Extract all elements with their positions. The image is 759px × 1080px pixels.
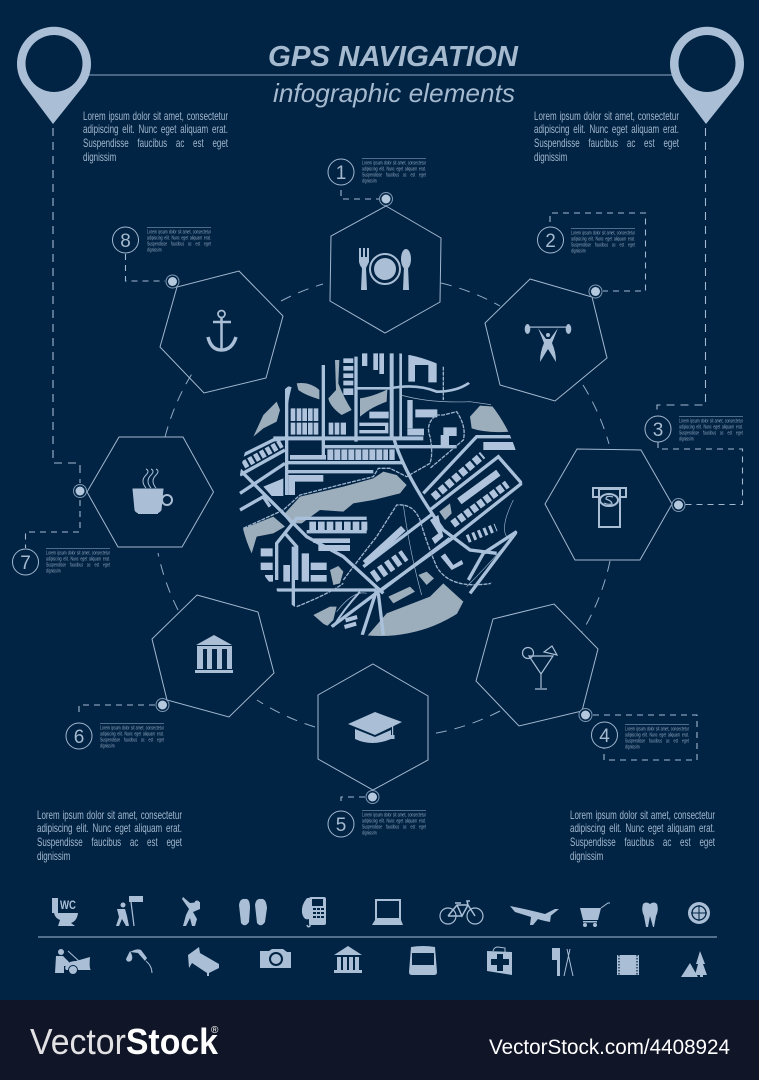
- connector dots: [74, 192, 685, 804]
- caption 8: adipiscing elit. Nunc eget aliquam erat.: [147, 235, 211, 241]
- watermark url: VectorStock.com/4408924: [489, 1036, 730, 1059]
- icon: toilet: [52, 898, 78, 926]
- icon: bank building: [334, 946, 362, 973]
- caption 7: Lorem ipsum dolor sit amet, consectetur: [46, 550, 110, 556]
- text block: top left: [83, 108, 228, 164]
- caption 1: [362, 158, 426, 186]
- icon: coffee cup: [133, 469, 172, 514]
- caption 2: Lorem ipsum dolor sit amet, consectetur: [571, 230, 635, 236]
- caption 5: Lorem ipsum dolor sit amet, consectetur: [362, 812, 426, 818]
- caption 5: adipiscing elit. Nunc eget aliquam erat.: [362, 818, 426, 824]
- icon: film strip: [617, 955, 639, 975]
- number badges: 1: [336, 163, 346, 184]
- dashed ring arcs: [158, 283, 610, 734]
- title: GPS NAVIGATION: [268, 41, 519, 73]
- icon: tooth: [642, 902, 658, 927]
- bottom icons row two: [55, 946, 707, 977]
- caption 6: adipiscing elit. Nunc eget aliquam erat.: [100, 731, 164, 737]
- caption 7: [46, 548, 110, 576]
- icon: discus thrower: [182, 897, 200, 926]
- icon: flip flops: [239, 899, 267, 925]
- text block: top left: Lorem ipsum dolor sit amet, consectetur: [83, 108, 228, 122]
- icon: cocktail: [522, 646, 557, 689]
- icon: camera: [260, 949, 291, 968]
- caption 8: Suspendisse faucibus ac est eget: [147, 241, 211, 247]
- icon: weightlifter: [525, 324, 571, 362]
- caption 4: dignissim: [625, 744, 640, 750]
- text block: bottom left: [36, 808, 182, 863]
- hexagon outlines: [87, 206, 672, 790]
- caption 7: Suspendisse faucibus ac est eget: [46, 562, 110, 568]
- caption 4: Lorem ipsum dolor sit amet, consectetur: [625, 726, 689, 732]
- title rule: [88, 74, 674, 76]
- caption 3: adipiscing elit. Nunc eget aliquam erat.: [679, 424, 743, 430]
- text block: bottom right: Lorem ipsum dolor sit amet, consectetur: [570, 808, 715, 822]
- icon: car mechanic: [55, 949, 91, 974]
- icon: cash machine: [593, 488, 626, 527]
- icon: plate and cutlery: [359, 248, 411, 290]
- watermark logo: VectorStock: [30, 1021, 219, 1062]
- caption 8: Lorem ipsum dolor sit amet, consectetur: [147, 229, 211, 235]
- caption 1: Suspendisse faucibus ac est eget: [362, 172, 426, 178]
- caption 2: [571, 228, 635, 256]
- icon: comb and scissors: [552, 948, 573, 976]
- caption 5: Suspendisse faucibus ac est eget: [362, 824, 426, 830]
- caption 5: [362, 810, 426, 838]
- text block: bottom left: Suspendisse faucibus ac est eget: [36, 835, 181, 849]
- caption 7: adipiscing elit. Nunc eget aliquam erat.: [46, 556, 110, 562]
- icon: first aid kit: [487, 947, 512, 975]
- text block: bottom left: dignissim: [36, 849, 70, 863]
- icon: laptop: [372, 899, 403, 925]
- caption 3: Suspendisse faucibus ac est eget: [679, 430, 743, 436]
- bottom icons row one: [52, 896, 710, 927]
- number badges: 4: [599, 726, 610, 747]
- text block: bottom right: Suspendisse faucibus ac est eget: [570, 835, 715, 849]
- caption 3: [679, 416, 743, 444]
- number badges: 3: [653, 420, 663, 441]
- map: streets: [240, 353, 522, 637]
- caption 2: adipiscing elit. Nunc eget aliquam erat.: [571, 236, 635, 242]
- map: building rows: [243, 443, 507, 577]
- icon: tent and tree: [681, 951, 707, 977]
- caption 6: dignissim: [100, 743, 115, 749]
- caption 3: Lorem ipsum dolor sit amet, consectetur: [679, 418, 743, 424]
- caption 4: Suspendisse faucibus ac est eget: [625, 738, 689, 744]
- text block: top right: Suspendisse faucibus ac est eget: [534, 136, 679, 150]
- text block: bottom right: dignissim: [570, 849, 603, 863]
- text block: bottom left: Lorem ipsum dolor sit amet, consectetur: [36, 808, 181, 822]
- map: water and parks: [240, 360, 510, 640]
- caption 3: dignissim: [679, 436, 694, 442]
- caption 8: dignissim: [147, 247, 162, 253]
- caption 2: dignissim: [571, 248, 586, 254]
- caption 6: [100, 723, 164, 751]
- icon: shopping cart: [580, 903, 610, 927]
- caption 6: Lorem ipsum dolor sit amet, consectetur: [100, 725, 164, 731]
- number badges: 7: [20, 553, 31, 574]
- number badges: 8: [120, 231, 131, 252]
- watermark band: [0, 1000, 759, 1080]
- text block: top right: [534, 108, 679, 164]
- map: buildings: [261, 353, 517, 629]
- icon: right map pin: [670, 27, 744, 124]
- icon: fuel pump nozzle: [126, 949, 152, 973]
- bottom icon divider: [38, 936, 717, 938]
- icon: graduation cap: [348, 712, 402, 743]
- icon: bank: [195, 635, 233, 673]
- caption 4: adipiscing elit. Nunc eget aliquam erat.: [625, 732, 689, 738]
- icon: anchor: [208, 310, 236, 350]
- icon: telephone: [302, 897, 326, 927]
- caption 4: [625, 724, 689, 752]
- icon: airplane: [510, 906, 559, 925]
- icon: toilet: WC: [60, 898, 76, 912]
- number badges: 2: [545, 231, 556, 252]
- caption 2: Suspendisse faucibus ac est eget: [571, 242, 635, 248]
- caption 1: adipiscing elit. Nunc eget aliquam erat.: [362, 166, 426, 172]
- icon: hiker at signpost: [116, 896, 143, 926]
- text block: top right: adipiscing elit. Nunc eget aliquam erat.: [534, 122, 679, 136]
- icon: roulette wheel: [688, 902, 710, 924]
- text block: top left: adipiscing elit. Nunc eget aliquam erat.: [83, 122, 228, 136]
- registered mark: ®: [211, 1025, 219, 1036]
- text block: top right: Lorem ipsum dolor sit amet, consectetur: [534, 108, 679, 122]
- caption 7: dignissim: [46, 568, 61, 574]
- caption 1: dignissim: [362, 178, 377, 184]
- central street map: [240, 353, 522, 640]
- caption 8: [147, 227, 211, 255]
- text block: bottom left: adipiscing elit. Nunc eget aliquam erat.: [36, 821, 181, 835]
- caption 5: dignissim: [362, 830, 377, 836]
- map: thin paths: [337, 395, 513, 612]
- caption 6: Suspendisse faucibus ac est eget: [100, 737, 164, 743]
- text block: top left: dignissim: [83, 150, 116, 164]
- number badges: [12, 159, 671, 837]
- text block: bottom right: [570, 808, 715, 863]
- dashed connectors: [26, 128, 742, 806]
- icon: left map pin: [17, 27, 91, 124]
- map: dashed trails: [243, 367, 492, 607]
- text block: top right: dignissim: [534, 150, 567, 164]
- icon: bicycle: [440, 901, 483, 924]
- caption 1: Lorem ipsum dolor sit amet, consectetur: [362, 160, 426, 166]
- number badges: 5: [336, 815, 346, 836]
- text block: top left: Suspendisse faucibus ac est eget: [83, 136, 228, 150]
- text block: bottom right: adipiscing elit. Nunc eget aliquam erat.: [570, 821, 715, 835]
- icon: bed: [188, 947, 219, 976]
- icon: bus: [409, 946, 437, 975]
- subtitle: infographic elements: [273, 78, 515, 108]
- number badges: 6: [74, 727, 84, 748]
